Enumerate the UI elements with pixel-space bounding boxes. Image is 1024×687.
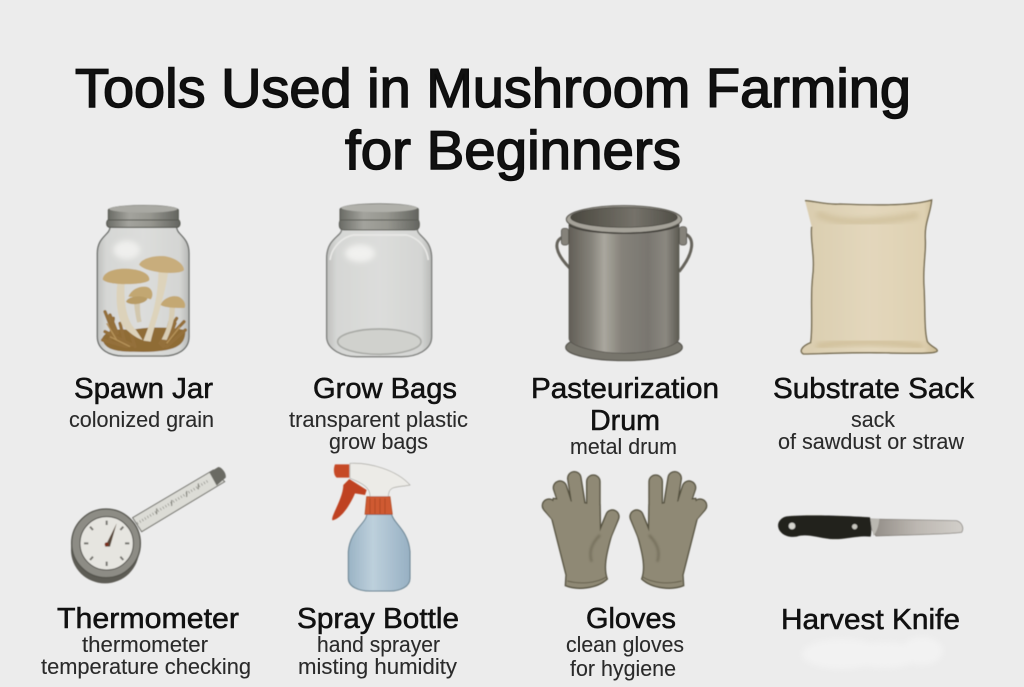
erased caption patch: [802, 637, 943, 669]
panel: substrate sack: [773, 200, 975, 454]
icon: knife: [778, 515, 963, 539]
label: grow bags: Grow Bags: [313, 373, 457, 405]
label: grow bags: grow bags: [329, 429, 428, 454]
label: substrate sack: of sawdust or straw: [778, 429, 964, 454]
icon: pair of gloves: [549, 478, 700, 588]
label: spawn jar: [69, 373, 214, 432]
label: spray bottle: Spray Bottle: [297, 603, 459, 635]
label: thermometer: Thermometer: [57, 603, 240, 635]
label: substrate sack: Substrate Sack: [773, 373, 975, 405]
label: pasteurization drum: Pasteurization: [531, 373, 719, 405]
icon: metal drum: [557, 206, 692, 361]
left glove: [549, 478, 612, 588]
icon: empty glass jar: [327, 204, 432, 357]
label: spray bottle: [297, 603, 459, 679]
label: spray bottle: hand sprayer: [317, 632, 440, 657]
icon: spray bottle: [332, 463, 410, 591]
icon: dial thermometer: [71, 467, 226, 583]
label: spawn jar: colonized grain: [69, 407, 214, 432]
panel: harvest knife: [778, 515, 963, 669]
panel: spawn jar: [69, 205, 214, 432]
right glove: [637, 478, 700, 588]
label: harvest knife: Harvest Knife: [781, 604, 960, 636]
panel: spray bottle: [297, 463, 459, 679]
title: Tools Used in Mushroom Farming: [75, 57, 911, 119]
label: thermometer: temperature checking: [41, 654, 251, 679]
label: gloves: Gloves: [586, 603, 676, 635]
label: grow bags: [289, 373, 468, 454]
label: gloves: [566, 603, 684, 681]
icon: sack: [801, 200, 937, 354]
icon: jar with mushrooms: [97, 205, 189, 356]
title: [75, 57, 911, 181]
label: gloves: clean gloves: [566, 632, 684, 657]
panel: thermometer: [41, 467, 251, 679]
title: for Beginners: [345, 119, 681, 181]
label: pasteurization drum: Drum: [590, 405, 660, 437]
panel: grow bags: [289, 204, 468, 454]
label: thermometer: [41, 603, 251, 679]
label: spawn jar: Spawn Jar: [74, 373, 214, 405]
label: pasteurization drum: [531, 373, 719, 459]
panel: gloves: [549, 478, 700, 681]
label: substrate sack: sack: [851, 407, 896, 432]
label: spray bottle: misting humidity: [298, 654, 457, 679]
label: pasteurization drum: metal drum: [570, 434, 677, 459]
label: thermometer: thermometer: [82, 632, 208, 657]
label: substrate sack: [773, 373, 975, 454]
label: gloves: for hygiene: [570, 656, 676, 681]
label: grow bags: transparent plastic: [289, 407, 468, 432]
panel: pasteurization drum: [531, 206, 719, 459]
